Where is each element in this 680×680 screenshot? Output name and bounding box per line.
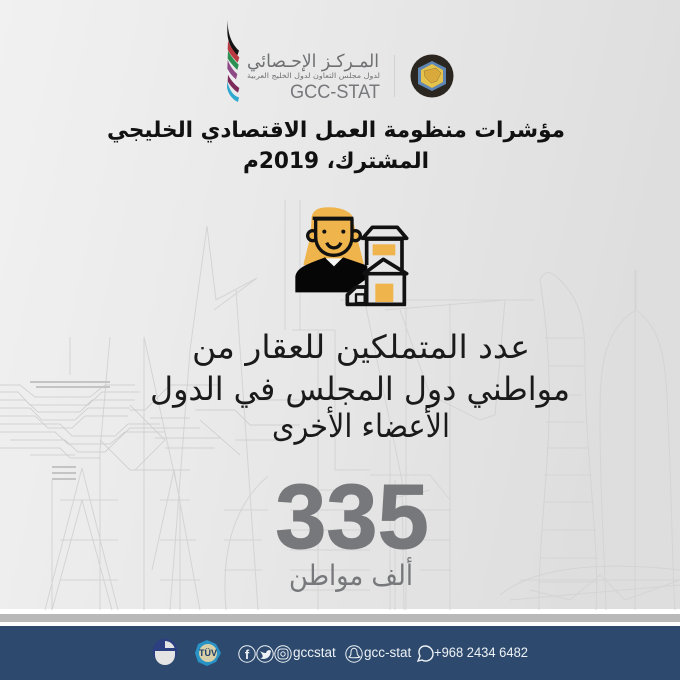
badge: TUV: TÜV	[199, 648, 217, 658]
icon: snapchat	[346, 646, 362, 662]
icon: instagram	[275, 646, 291, 662]
logo ribbon	[227, 20, 239, 102]
handle: gccstat: gccstat	[293, 645, 336, 660]
grey band	[0, 614, 680, 622]
icon: whatsapp	[418, 646, 433, 661]
big number: 335	[275, 466, 429, 568]
title: مؤشرات منظومة العمل الاقتصادي الخليجي	[107, 118, 565, 143]
badge: ISO	[152, 638, 178, 665]
logo divider	[394, 55, 395, 97]
logo Arabic name: المـركـز الإحـصائي	[247, 51, 379, 72]
social icons	[239, 646, 433, 662]
logo Latin name: GCC-STAT	[290, 82, 380, 103]
icon: twitter	[257, 646, 273, 662]
logo: GCC-STAT	[227, 20, 380, 103]
body text: الأعضاء الأخرى	[272, 406, 450, 445]
background circuit dots	[30, 381, 110, 480]
upper house	[367, 239, 402, 270]
icon: citizen with houses	[295, 207, 407, 304]
body	[295, 257, 367, 292]
background circuit lines	[0, 385, 300, 470]
unit label: ألف مواطن	[289, 556, 413, 592]
icon: facebook	[239, 646, 255, 662]
logo Arabic subtitle: لدول مجلس التعاون لدول الخليج العربية	[247, 72, 380, 80]
garage	[347, 287, 366, 304]
lower house	[367, 273, 404, 304]
body text: مواطني دول المجلس في الدول	[150, 370, 570, 408]
hair	[303, 207, 364, 265]
handle: gcc-stat: gcc-stat	[364, 645, 412, 660]
body text	[150, 328, 570, 445]
GCC emblem	[410, 54, 454, 98]
footer bar	[0, 626, 680, 680]
body text: عدد المتملكين للعقار من	[192, 328, 530, 366]
ears	[308, 231, 318, 241]
title	[107, 118, 565, 174]
badge: TUV	[195, 640, 221, 666]
face	[316, 219, 352, 255]
phone: +968 2434 6482	[434, 645, 528, 660]
title: المشترك، 2019م	[243, 149, 429, 174]
background skyline illustration	[45, 200, 680, 610]
icon: facebook: f	[245, 647, 250, 662]
